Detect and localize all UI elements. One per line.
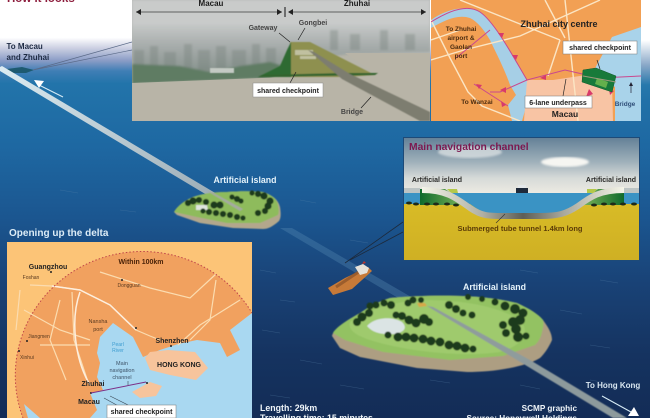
text: credits: SCMP graphic	[522, 404, 577, 413]
delta labels: HONG KONG	[157, 362, 202, 369]
heading: Opening up the delta: Opening up the delta	[9, 228, 109, 239]
text: length and travelling time	[260, 404, 372, 418]
map text: Macau	[552, 109, 578, 119]
label: To Hong Kong: To Hong Kong	[586, 381, 640, 390]
map text	[446, 19, 636, 119]
photo leader lines	[279, 28, 371, 108]
water channel	[431, 8, 530, 121]
label: To Macau and Zhuhai: To Macau	[6, 42, 43, 51]
Macau land	[524, 74, 613, 121]
Hong Kong islands	[145, 350, 208, 380]
photo labels: Bridge	[341, 109, 363, 116]
delta labels: Within 100km	[118, 259, 164, 266]
sea at right	[593, 27, 641, 121]
tube tunnel	[422, 190, 624, 216]
map text: airport &	[447, 35, 475, 42]
delta labels: Nansha	[89, 319, 108, 325]
bridge line	[91, 382, 146, 393]
panel: main navigation channel	[403, 137, 640, 261]
delta labels: Guangzhou	[29, 264, 67, 271]
rock dots	[406, 202, 637, 206]
ship on section	[516, 188, 528, 193]
label: To Macau and Zhuhai	[6, 42, 49, 62]
map text: To Zhuhai	[446, 26, 476, 33]
water	[132, 53, 430, 86]
bridge: To Macau span	[0, 66, 232, 207]
callout: shared checkpoint on photo	[253, 83, 323, 97]
callout: shared checkpoint on map	[563, 41, 637, 54]
route arrows	[476, 33, 614, 107]
delta labels: Jiangmen	[28, 334, 50, 340]
delta labels	[20, 259, 202, 406]
map text: Zhuhai city centre	[520, 19, 598, 29]
label: Artificial island small: Artificial island	[213, 175, 277, 185]
text: credits	[466, 404, 577, 418]
artificial island large	[332, 295, 627, 418]
city dots	[18, 271, 172, 394]
callout: 6-lane underpass	[525, 96, 592, 108]
extent arrows Macau and Zhuhai	[136, 7, 426, 17]
map text: To Wanzai	[461, 99, 493, 106]
map text: Bridge	[615, 101, 636, 108]
delta labels: Dongguan	[117, 283, 141, 289]
callout: shared checkpoint on photo: shared checkpoint	[257, 88, 320, 95]
callout: shared checkpoint on map: shared checkpoint	[569, 45, 632, 52]
sea in section	[404, 193, 639, 213]
ship	[328, 261, 372, 295]
sea ripples	[60, 190, 618, 398]
panel: main navigation channel: Artificial island	[412, 177, 462, 184]
arrow: toward Hong Kong	[602, 396, 639, 416]
panel: main navigation channel: Submerged tube tunnel 1.4km long	[457, 224, 583, 233]
photo labels	[199, 0, 370, 116]
bridge in the photo	[308, 50, 430, 121]
label: To Macau and Zhuhai: and Zhuhai	[6, 53, 49, 62]
leader lines to the photo	[33, 42, 132, 70]
checkpoint block	[582, 68, 616, 92]
delta labels: Zhuhai	[82, 381, 105, 388]
delta labels: Pearl	[112, 342, 124, 348]
route lines	[431, 8, 641, 106]
photo labels: Gongbei	[299, 20, 327, 27]
water	[90, 313, 252, 418]
arrow: toward Macau	[34, 80, 63, 97]
panel: delta map	[7, 242, 252, 418]
delta labels: navigation	[109, 368, 135, 374]
leader lines to the cross-section	[345, 222, 403, 263]
delta labels: Foshan	[23, 275, 40, 281]
callout: shared checkpoint on delta	[107, 405, 176, 418]
text: length and travelling time: Length: 29km	[260, 403, 317, 413]
green embankments	[420, 189, 470, 205]
delta labels: Main	[116, 361, 128, 367]
seabed	[404, 204, 639, 260]
distant land	[7, 67, 34, 73]
panel: Zhuhai city map	[431, 0, 641, 121]
panel: aerial photo Macau Zhuhai	[132, 0, 430, 121]
city skyline	[132, 24, 430, 73]
label: Artificial island large: Artificial island	[463, 282, 526, 292]
delta labels: Shenzhen	[155, 338, 189, 345]
map text: port	[455, 53, 468, 60]
delta labels: channel	[112, 375, 132, 381]
map text: Gaolan	[450, 44, 472, 51]
section labels: Main navigation channel	[409, 142, 529, 153]
roads	[431, 0, 600, 121]
100km circle filled area	[15, 251, 252, 418]
delta labels: port	[93, 327, 103, 333]
bridges	[404, 188, 420, 193]
delta labels: River	[112, 348, 124, 354]
delta labels: Xinhui	[20, 355, 34, 361]
panel: main navigation channel: Artificial island	[586, 177, 636, 184]
dashed radius circle	[15, 251, 252, 418]
bridge: tunnel section	[280, 228, 425, 308]
reclaimed land	[290, 42, 375, 77]
roads	[16, 272, 240, 382]
artificial island small	[174, 191, 281, 229]
delta labels: Macau	[78, 399, 100, 406]
callout: 6-lane underpass: 6-lane underpass	[529, 100, 587, 107]
callout: shared checkpoint on delta: shared checkpoint	[111, 409, 173, 416]
photo labels: Gateway	[249, 25, 278, 32]
